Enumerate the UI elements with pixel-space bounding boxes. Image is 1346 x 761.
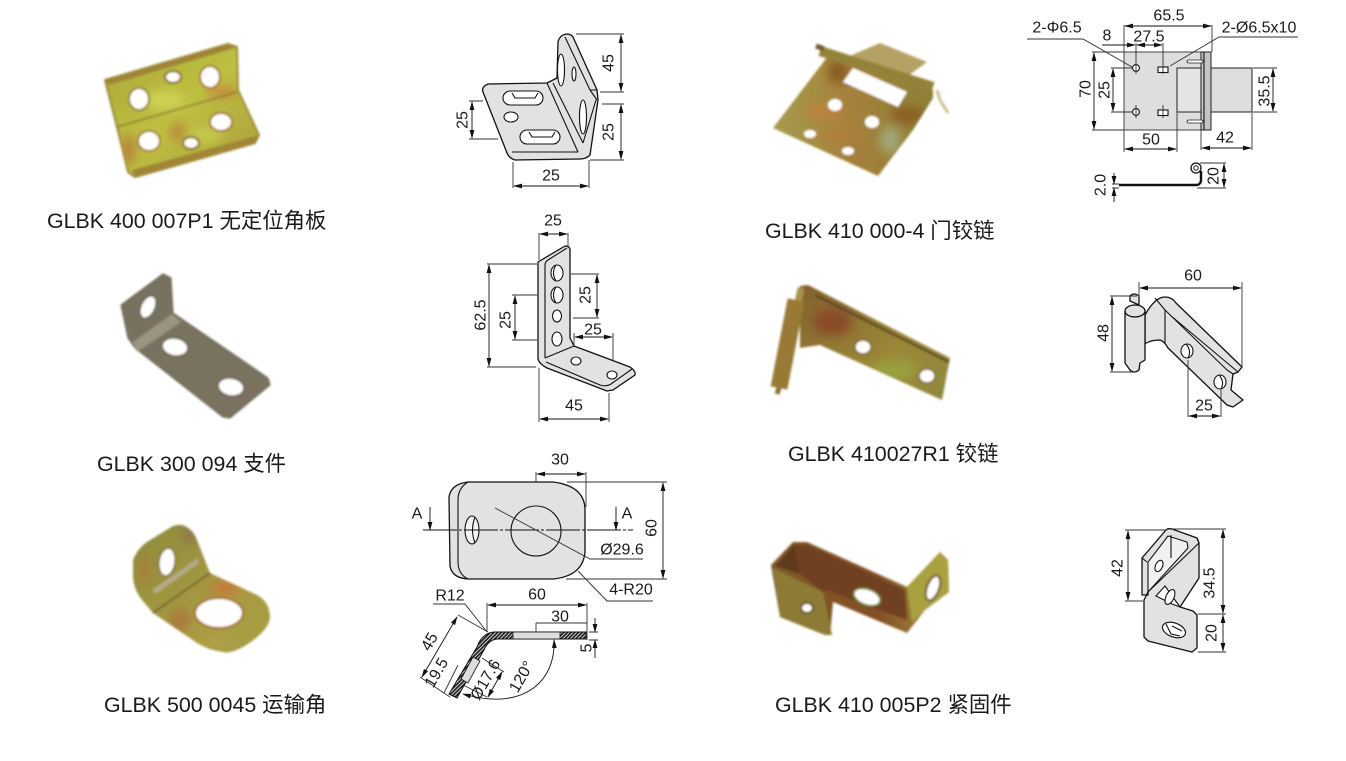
technical drawing: GLBK 400 007P1: 25 bbox=[454, 111, 472, 129]
technical drawing: GLBK 300 094: 25 bbox=[544, 212, 562, 230]
technical drawing: GLBK 410027R1 bbox=[1096, 268, 1243, 417]
technical drawing: GLBK 410 000-4: 35.5 bbox=[1256, 75, 1274, 107]
technical drawing: GLBK 400 007P1: 45 bbox=[600, 54, 618, 72]
product photo: GLBK 410 005P2 fastener bbox=[771, 542, 949, 635]
product photo: GLBK 400 007P1 angle plate bbox=[105, 44, 259, 177]
technical drawing: GLBK 410 000-4 bbox=[1027, 8, 1298, 202]
technical drawing: GLBK 500 0045: 30 bbox=[551, 608, 569, 626]
product photo: GLBK 410027R1 hinge bbox=[777, 285, 950, 400]
technical drawing: GLBK 410 000-4: 8 bbox=[1103, 28, 1112, 44]
technical drawing: GLBK 500 0045: Ø17.6 bbox=[468, 657, 504, 703]
technical drawing: GLBK 300 094: 25 bbox=[584, 322, 602, 338]
technical drawing: GLBK 500 0045: A bbox=[622, 506, 633, 522]
technical drawing: GLBK 500 0045: 30 bbox=[551, 452, 569, 468]
technical drawing: GLBK 410 000-4: 2-Φ6.5 bbox=[1032, 20, 1082, 36]
technical drawing: GLBK 410 000-4: 42 bbox=[1216, 130, 1234, 146]
technical drawing: GLBK 500 0045: 4-R20 bbox=[609, 582, 653, 598]
technical drawing: GLBK 500 0045: 60 bbox=[644, 519, 660, 537]
technical drawing: GLBK 410027R1: 25 bbox=[1195, 398, 1213, 414]
caption: GLBK 300 094: GLBK 300 094 支件 bbox=[97, 452, 286, 476]
technical drawing: GLBK 500 0045: 120° bbox=[506, 658, 538, 696]
technical drawing: GLBK 500 0045: 45 bbox=[418, 630, 442, 654]
product photo: GLBK 500 0045 transport angle bbox=[133, 525, 270, 652]
technical drawing: GLBK 410027R1: 48 bbox=[1096, 324, 1112, 342]
technical drawing: GLBK 400 007P1 bbox=[454, 34, 624, 188]
technical drawing: GLBK 410027R1: 60 bbox=[1184, 268, 1202, 284]
technical drawing: GLBK 400 007P1: 25 bbox=[600, 123, 618, 141]
caption: GLBK 410 000-4: GLBK 410 000-4 门铰链 bbox=[765, 219, 994, 243]
caption: GLBK 410 005P2: GLBK 410 005P2 紧固件 bbox=[775, 693, 1012, 717]
technical drawing: GLBK 300 094: 25 bbox=[578, 286, 594, 304]
technical drawing: GLBK 410 000-4: 65.5 bbox=[1153, 8, 1185, 24]
technical drawing: GLBK 500 0045: A bbox=[412, 506, 423, 522]
technical drawing: GLBK 500 0045: 5 bbox=[578, 643, 596, 652]
technical drawing: GLBK 410 000-4: 70 bbox=[1078, 80, 1094, 98]
technical drawing: GLBK 410 000-4: 2-Ø6.5x10 bbox=[1222, 20, 1296, 36]
technical drawing: GLBK 500 0045: 19.5 bbox=[422, 655, 452, 691]
technical drawing: GLBK 410 000-4: 2.0 bbox=[1092, 174, 1110, 196]
technical drawing: GLBK 500 0045 bbox=[412, 452, 667, 703]
technical drawing: GLBK 410 000-4: 50 bbox=[1142, 132, 1160, 148]
caption: GLBK 400 007P1: GLBK 400 007P1 无定位角板 bbox=[47, 209, 326, 233]
caption: GLBK 410027R1: GLBK 410027R1 铰链 bbox=[788, 442, 998, 466]
technical drawing: GLBK 410 000-4: 27.5 bbox=[1133, 28, 1165, 46]
technical drawing: GLBK 410 005P2: 20 bbox=[1204, 624, 1220, 642]
technical drawing: GLBK 500 0045: 60 bbox=[528, 586, 546, 604]
technical drawing: GLBK 410 000-4: 25 bbox=[1096, 81, 1114, 99]
technical drawing: GLBK 410 005P2: 42 bbox=[1110, 559, 1126, 577]
technical drawing: GLBK 500 0045: Ø29.6 bbox=[600, 542, 644, 558]
technical drawing: GLBK 300 094: 62.5 bbox=[472, 299, 490, 331]
technical drawing: GLBK 300 094: 45 bbox=[565, 398, 583, 414]
technical drawing: GLBK 300 094: 25 bbox=[498, 311, 514, 329]
technical drawing: GLBK 500 0045: R12 bbox=[435, 588, 465, 604]
technical drawing: GLBK 410 005P2 bbox=[1110, 529, 1226, 652]
technical drawing: GLBK 400 007P1: 25 bbox=[542, 168, 560, 184]
technical drawing: GLBK 410 005P2: 34.5 bbox=[1202, 567, 1218, 599]
technical drawing: GLBK 410 000-4: 20 bbox=[1206, 167, 1222, 185]
product photo: GLBK 300 094 bracket bbox=[121, 274, 270, 418]
technical drawing: GLBK 300 094 bbox=[472, 212, 635, 422]
product photo: GLBK 410 000-4 door hinge bbox=[773, 43, 948, 176]
caption: GLBK 500 0045: GLBK 500 0045 运输角 bbox=[104, 693, 326, 717]
